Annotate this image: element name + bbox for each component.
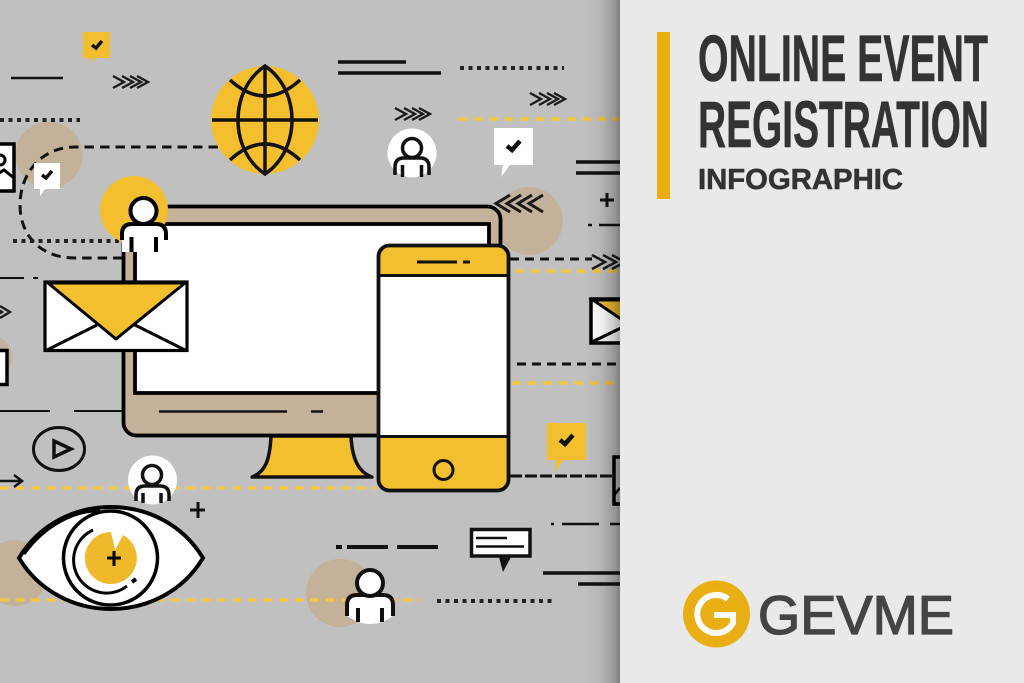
icon: photo frame left xyxy=(0,144,14,191)
icon: yellow check bubble top xyxy=(83,32,110,62)
dotted lines xyxy=(0,68,564,601)
icon: play button xyxy=(34,428,84,470)
monitor screen xyxy=(135,224,489,393)
icon: globe xyxy=(211,66,319,174)
monitor xyxy=(124,206,500,477)
black dash and rule lines xyxy=(0,62,620,584)
icon: yellow check bubble right xyxy=(547,423,586,472)
panel: title sidebar xyxy=(620,0,1024,683)
icon: user bottom xyxy=(347,570,393,624)
logo wordmark: GEVME xyxy=(758,584,954,646)
logo mark xyxy=(683,580,750,648)
phone header xyxy=(378,246,508,276)
icon: chevron arrows xyxy=(0,76,625,318)
icon: chat bubble xyxy=(472,530,530,572)
icon: plus signs xyxy=(190,193,614,518)
subtitle: INFOGRAPHIC xyxy=(698,164,903,196)
phone body xyxy=(378,246,508,490)
icon: photo frame lower left xyxy=(0,350,7,384)
monitor stand xyxy=(252,436,372,477)
icon: eye xyxy=(19,507,203,609)
title xyxy=(698,21,989,161)
icon: arrow xyxy=(0,475,22,487)
panel shadow xyxy=(585,0,620,683)
phone outline xyxy=(378,246,508,490)
icon: envelope xyxy=(45,282,187,350)
icon: photo frame right xyxy=(614,457,630,504)
yellow dashed lines xyxy=(0,119,620,600)
icon: white check bubble left xyxy=(34,163,60,196)
monitor frame xyxy=(124,206,500,436)
accent bar xyxy=(657,32,670,199)
background tan circles xyxy=(0,122,563,627)
icon: user in white circle bottom xyxy=(128,456,177,504)
icon: user in white circle top xyxy=(388,128,436,178)
phone footer xyxy=(378,436,508,490)
icon: user over monitor xyxy=(122,198,166,252)
panel: illustration background xyxy=(0,0,620,683)
smartphone xyxy=(378,246,508,490)
icon: yellow circle behind user xyxy=(100,176,168,244)
logo: GEVME xyxy=(683,580,954,648)
icon: white check bubble right xyxy=(494,128,533,177)
icon: envelope right xyxy=(591,299,641,343)
monitor bezel lines xyxy=(159,410,323,413)
